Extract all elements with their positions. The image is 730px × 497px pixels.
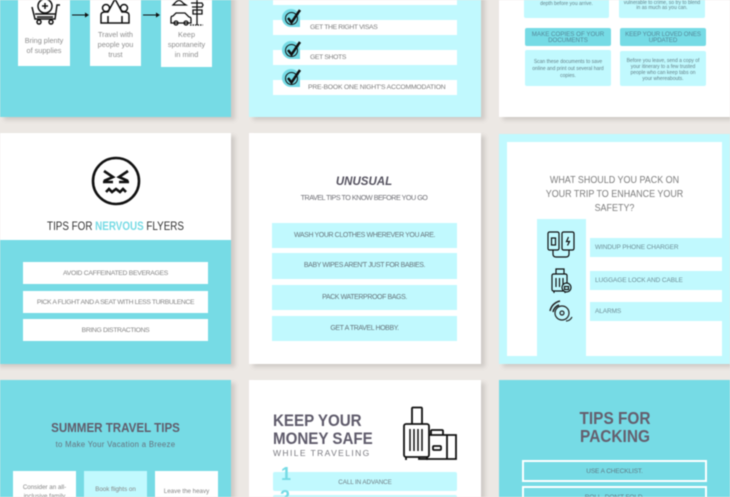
panel: what to pack for safety [499, 134, 730, 364]
heading: tips for packing [579, 408, 651, 446]
label: avoid caffeinated beverages: AVOID CAFFEINATED BEVERAGES [63, 270, 168, 277]
panel: supplies, people and spontaneity cards [0, 0, 231, 117]
heading: what should you pack: WHAT SHOULD YOU PACK ON [550, 175, 679, 186]
row: avoid caffeinated beverages [23, 262, 208, 284]
label: travel with people you trust: trust [108, 50, 123, 59]
row: bring distractions [23, 319, 208, 341]
heading: tips for nervous flyers: TIPS FOR NERVOUS FLYERS [47, 219, 184, 233]
heading: tips for packing: PACKING [580, 426, 650, 446]
card: book flights [84, 471, 147, 497]
panel: summer travel tips [0, 380, 231, 497]
icon: check badge three [282, 68, 302, 88]
row: get a travel hobby [272, 316, 457, 341]
row: alarms [590, 302, 730, 321]
label: bring plenty of supplies: of supplies [27, 46, 61, 55]
label: keep spontaneity in mind: Keep [178, 30, 195, 39]
heading: keep your money safe [273, 411, 373, 448]
row: baby wipes [272, 253, 457, 279]
box: upper right tip [619, 0, 705, 18]
panel: tips for packing [499, 380, 730, 497]
arrow: second to third card [142, 12, 160, 18]
heading: unusual: UNUSUAL [336, 176, 392, 188]
subheading: while traveling: WHILE TRAVELING [273, 448, 371, 458]
label: keep loved ones updated [625, 31, 702, 44]
row: luggage lock and cable [590, 271, 730, 290]
numeral: 1: 1 [281, 464, 291, 484]
text: scan documents: online and print out several hard [532, 66, 604, 72]
panel: keep your money safe [249, 380, 481, 497]
label: keep spontaneity in mind: in mind [175, 50, 198, 59]
step bar: call in advance [273, 472, 457, 491]
text: vulnerable to crime [623, 0, 700, 11]
text: scan documents: Scan these documents to save [534, 59, 602, 65]
box: upper left tip [524, 0, 609, 18]
card: keep spontaneity in mind [161, 0, 212, 67]
text: send itinerary: your itinerary to a few trusted [631, 64, 695, 70]
icon: luggage [402, 406, 458, 461]
label: pack waterproof bags: PACK WATERPROOF BAGS. [322, 294, 407, 301]
text: scan documents: copies. [560, 73, 576, 79]
heading: keep your money safe: KEEP YOUR [273, 411, 362, 430]
label: pre-book one night's accommodation: PRE-BOOK ONE NIGHT'S ACCOMMODATION [308, 84, 446, 91]
label: travel with people you trust [98, 30, 134, 59]
icon: phone and power bank [546, 230, 576, 258]
icon: supply cart [30, 0, 61, 26]
label: make copies: MAKE COPIES OF YOUR [532, 31, 604, 38]
teal lower block [0, 240, 231, 364]
text: scan documents [532, 58, 604, 79]
outlined row: use a checklist [522, 460, 707, 482]
panel: safety tips grid [499, 0, 730, 117]
arrow: first to second card [71, 12, 90, 18]
label: call in advance: CALL IN ADVANCE [338, 479, 392, 486]
label: pick a flight: PICK A FLIGHT AND A SEAT WITH LESS TURBULENCE [37, 299, 194, 306]
text: depth before you arrive: depth before you arrive. [540, 1, 593, 7]
panel: pre-trip checklist [249, 0, 481, 117]
label: make copies: DOCUMENTS [548, 37, 588, 44]
row: wash your clothes [272, 223, 457, 248]
heading: what should you pack: YOUR TRIP TO ENHANCE YOUR [546, 189, 683, 200]
icon column [537, 219, 586, 356]
icon: high five [99, 0, 131, 25]
heading: tips for packing: TIPS FOR [579, 408, 651, 428]
row: cut-off first item [273, 0, 457, 5]
text: consider an all-inclusive: Consider an all- [23, 484, 66, 491]
text: leave the heavy: Leave the heavy [164, 488, 209, 495]
row: pre-book accommodation [273, 80, 457, 95]
text: vulnerable to crime: in as much as you can. [636, 5, 688, 11]
label: bring plenty of supplies: Bring plenty [25, 36, 63, 45]
text: send itinerary: Before you leave, send a copy of [627, 58, 699, 64]
label: keep loved ones updated: UPDATED [649, 37, 677, 44]
label: windup phone charger: WINDUP PHONE CHARGER [595, 244, 678, 251]
icon: check badge one [282, 8, 302, 28]
label: use a checklist: USE A CHECKLIST. [586, 468, 643, 475]
label: bring distractions: BRING DISTRACTIONS [82, 327, 149, 334]
subheading: make your vacation a breeze: to Make Your Vacation a Breeze [56, 440, 175, 449]
label: baby wipes: BABY WIPES AREN'T JUST FOR BABIES. [304, 262, 425, 269]
label: alarms: ALARMS [595, 308, 621, 315]
icon: alarm [548, 300, 573, 322]
label: travel with people you trust: Travel with [98, 30, 133, 39]
row: pick a flight [23, 291, 208, 313]
label: wash your clothes: WASH YOUR CLOTHES WHEREVER YOU ARE. [294, 232, 435, 239]
row: windup phone charger [590, 238, 730, 257]
card: leave the heavy [155, 471, 218, 497]
panel: unusual travel tips [249, 133, 481, 364]
inner white sheet [507, 142, 722, 356]
text: send itinerary: your whereabouts. [642, 76, 684, 82]
card: all-inclusive [13, 471, 76, 497]
step bar: second step [273, 495, 457, 497]
text: send itinerary: people who can keep tabs on [630, 70, 696, 76]
text: book flights on: Book flights on [95, 486, 136, 493]
heading: what should you pack: SAFETY? [595, 203, 634, 214]
icon: car and signpost [170, 0, 204, 26]
label: keep spontaneity in mind [168, 30, 206, 59]
label: get shots: GET SHOTS [310, 54, 346, 61]
box: send itinerary text [620, 51, 706, 86]
label: keep loved ones updated: KEEP YOUR LOVED ONES [625, 31, 701, 38]
card: bring plenty of supplies [18, 0, 70, 66]
text: consider an all-inclusive [22, 484, 66, 497]
card: travel with people you trust [90, 0, 141, 66]
heading: keep your money safe: MONEY SAFE [273, 428, 373, 448]
label: get the right visas: GET THE RIGHT VISAS [310, 24, 377, 31]
label: bring plenty of supplies [24, 36, 64, 55]
label: luggage lock and cable: LUGGAGE LOCK AND CABLE [595, 277, 683, 284]
heading: keep your loved ones updated [620, 28, 706, 46]
heading: summer travel tips: SUMMER TRAVEL TIPS [51, 420, 180, 435]
icon: check badge two [281, 40, 302, 60]
text: vulnerable to crime: vulnerable to crime, so try to blend [624, 0, 700, 6]
icon: luggage with lock [550, 268, 572, 294]
label: keep spontaneity in mind: spontaneity [168, 40, 205, 49]
text: send itinerary [626, 58, 700, 82]
subheading: travel tips to know before you go: TRAVEL TIPS TO KNOW BEFORE YOU GO [301, 193, 427, 202]
row: get shots [273, 50, 457, 65]
label: make copies [532, 31, 604, 44]
row: get the right visas [273, 20, 457, 35]
row: pack waterproof bags [272, 285, 457, 310]
label: travel with people you trust: people you [98, 40, 133, 49]
heading: make copies of your documents [525, 28, 611, 46]
outlined row: roll, don't fold [522, 486, 707, 497]
heading: what should you pack [546, 175, 684, 214]
label: get a travel hobby: GET A TRAVEL HOBBY. [330, 325, 399, 332]
box: scan documents text [525, 50, 611, 86]
icon: nervous face [90, 156, 142, 206]
panel: tips for nervous flyers [0, 133, 231, 364]
